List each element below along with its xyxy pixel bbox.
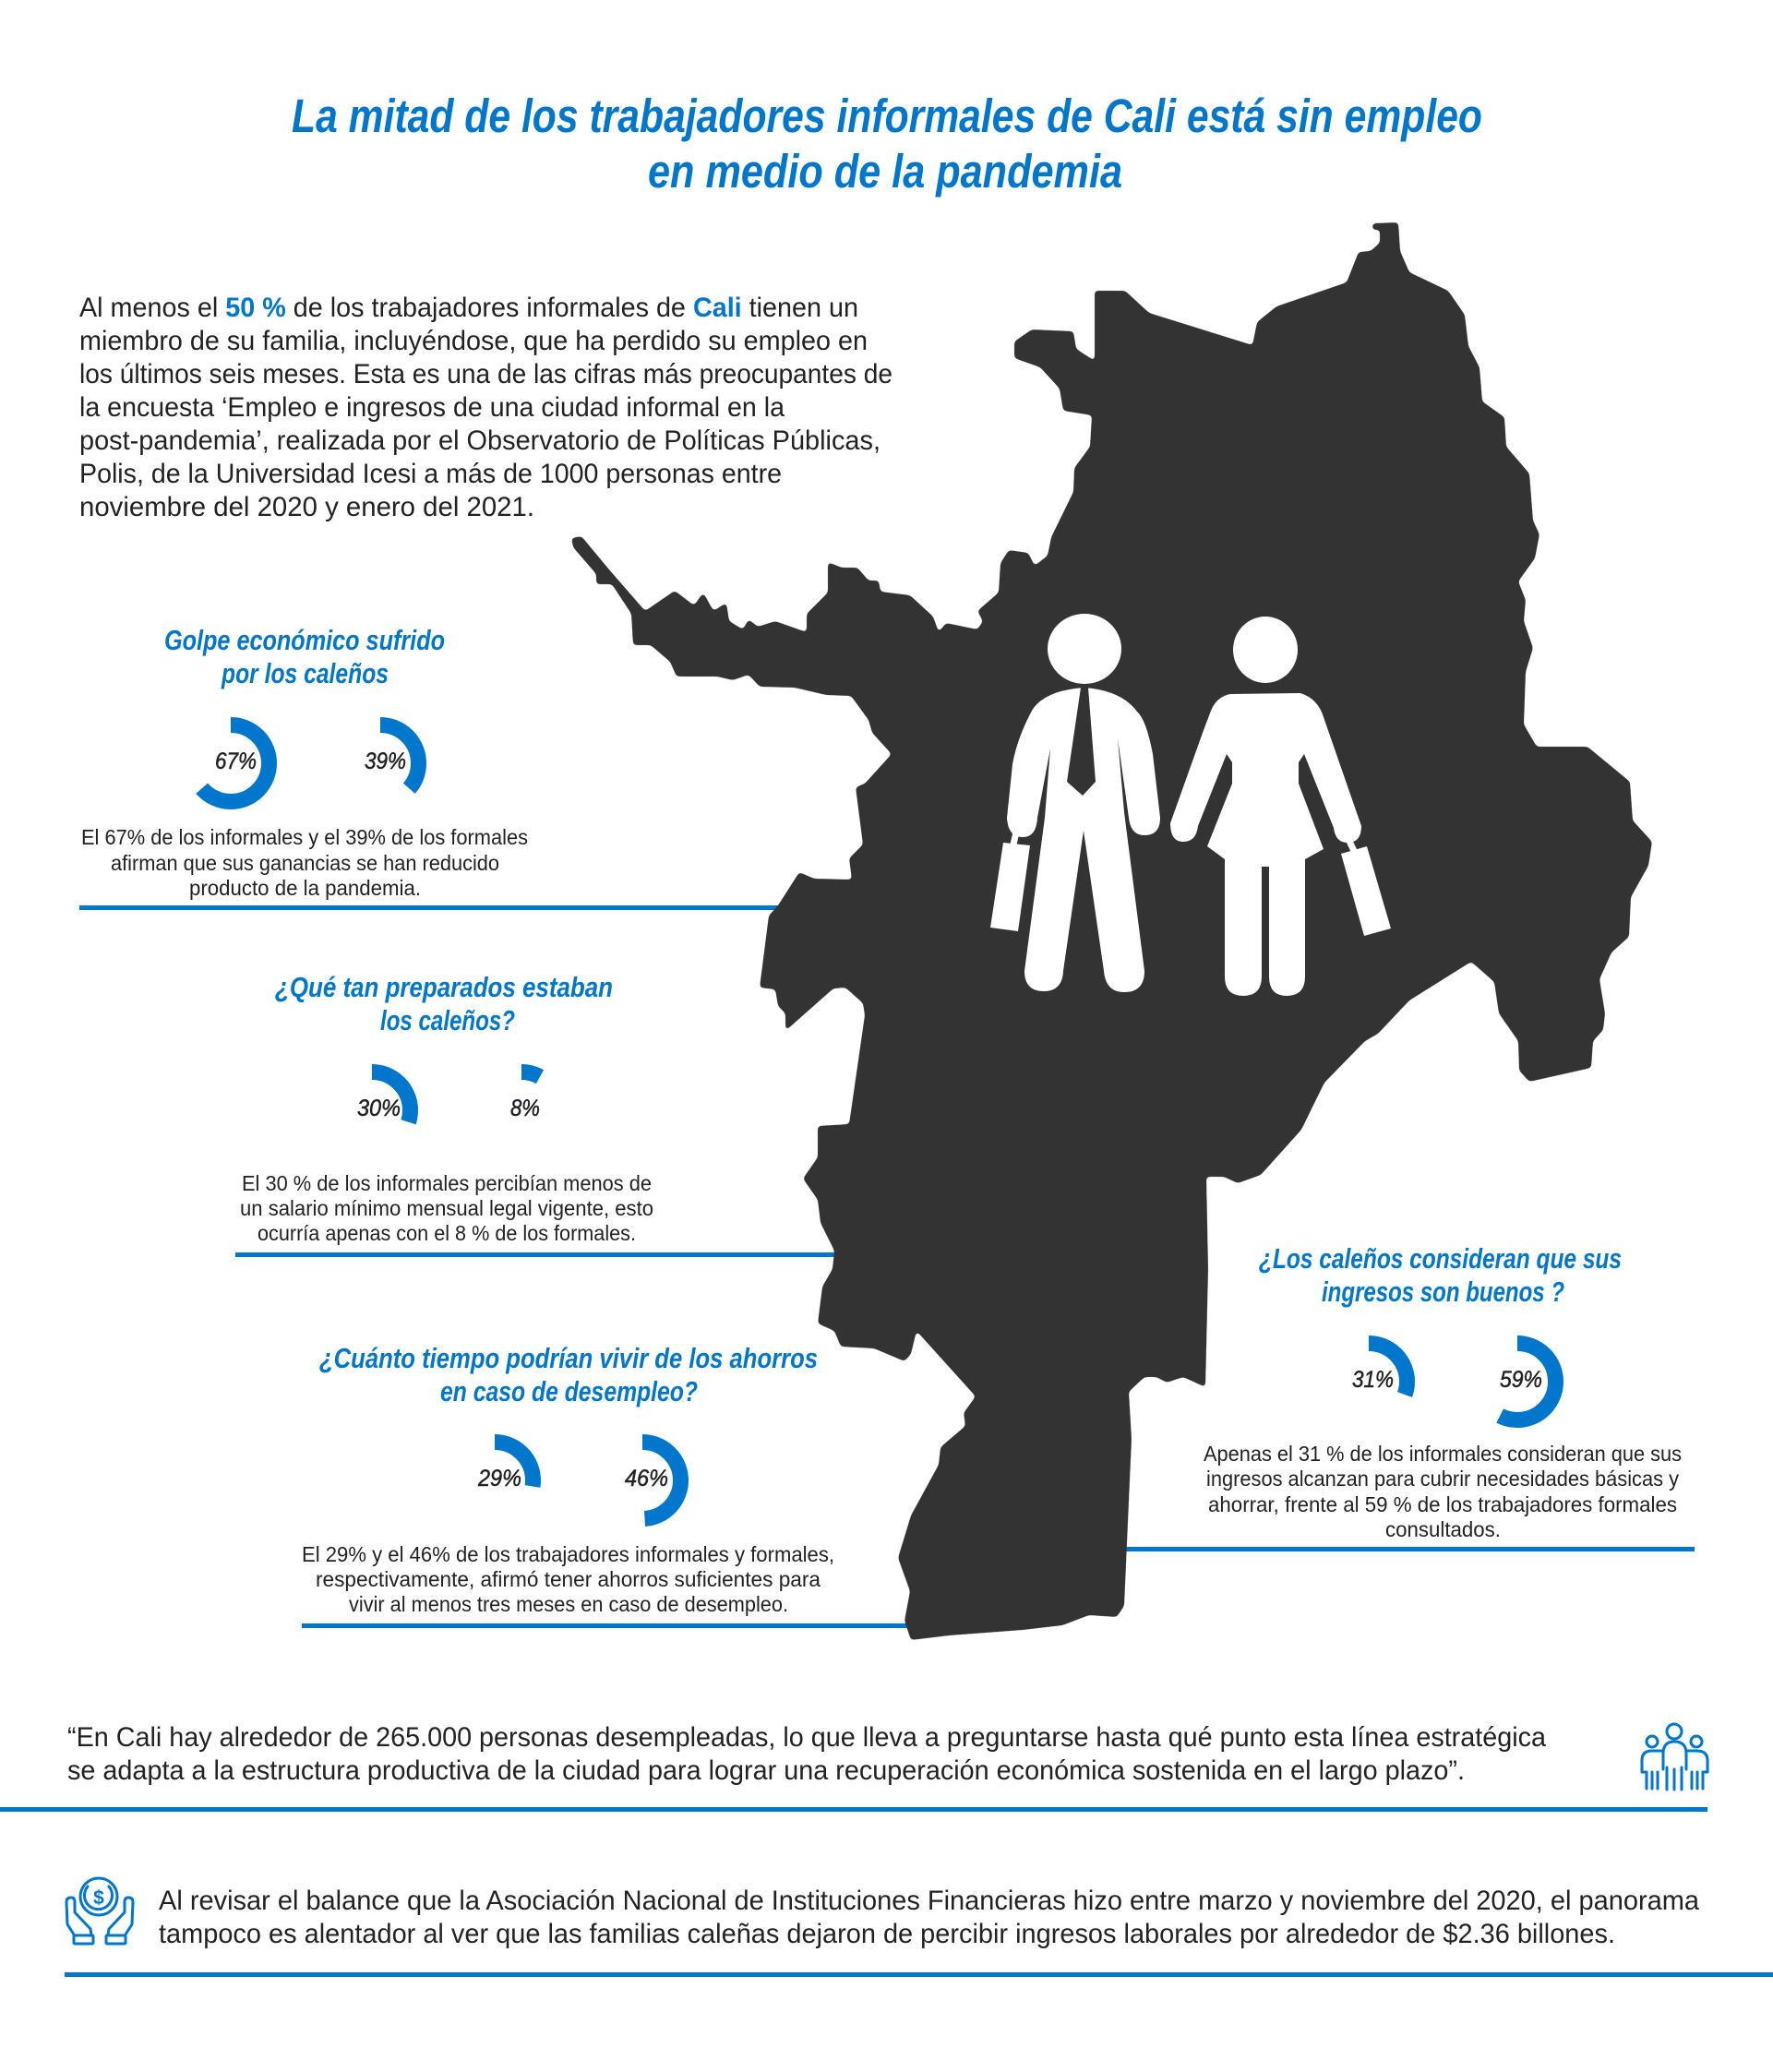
quote: se adapta a la estructura productiva de la ciudad para lograr una recuperación económica sostenida en el largo plazo”.: [67, 1755, 1465, 1786]
heading: ahorros: en caso de desempleo?: [440, 1375, 698, 1407]
text: ahorros: vivir al menos tres meses en caso de desempleo.: [349, 1592, 788, 1616]
intro paragraph: los últimos seis meses. Esta es una de las cifras más preocupantes de: [79, 359, 892, 389]
panel: ahorros: [302, 1342, 920, 1628]
text: ingresos: Apenas el 31 % de los informales consideran que sus: [1204, 1442, 1682, 1466]
intro paragraph: noviembre del 2020 y enero del 2021.: [79, 492, 534, 522]
icon: group of people: [1642, 1724, 1707, 1790]
text: ingresos: [1204, 1442, 1682, 1541]
map of Cali with people: [571, 222, 1652, 1640]
text: golpe económico: producto de la pandemia.: [189, 876, 421, 900]
donut: 29%: 29%: [477, 1466, 521, 1491]
text: golpe económico: [81, 825, 528, 900]
donut: 46%: [604, 1442, 681, 1519]
donut: 39%: 39%: [365, 749, 406, 774]
text: preparación: [240, 1171, 653, 1245]
heading: preparación: ¿Qué tan preparados estaban: [275, 971, 613, 1003]
donut: 59%: [1479, 1344, 1556, 1419]
intro paragraph: Polis, de la Universidad Icesi a más de 1000 personas entre: [79, 459, 782, 489]
intro paragraph: post-pandemia’, realizada por el Observatorio de Políticas Públicas,: [79, 425, 881, 456]
text: golpe económico: afirman que sus ganancias se han reducido: [111, 851, 499, 875]
text: preparación: El 30 % de los informales percibían menos de: [242, 1171, 652, 1195]
intro paragraph: [79, 293, 892, 522]
donut: 67%: 67%: [215, 749, 257, 774]
donut: 31%: [1331, 1344, 1407, 1419]
heading: ahorros: ¿Cuánto tiempo podrían vivir de los ahorros: [319, 1342, 818, 1374]
man's briefcase: [990, 828, 1030, 931]
closing text: [159, 1886, 1699, 1949]
donut: 67%: [192, 725, 270, 801]
quote: [67, 1722, 1546, 1786]
panel: ingresos: [1108, 1242, 1695, 1551]
intro paragraph: Al menos el 50 % de los trabajadores informales de Cali tienen un: [79, 293, 858, 323]
text: preparación: un salario mínimo mensual legal vigente, esto: [240, 1196, 653, 1220]
donut: 59%: 59%: [1500, 1367, 1542, 1393]
tie: [1067, 688, 1096, 796]
woman figure: [1170, 617, 1391, 996]
map silhouette: [571, 222, 1652, 1640]
donut: 46%: 46%: [625, 1466, 668, 1491]
intro paragraph: miembro de su familia, incluyéndose, que ha perdido su empleo en: [79, 326, 868, 356]
text: ahorros: respectivamente, afirmó tener ahorros suficientes para: [316, 1567, 821, 1591]
heading: golpe económico: por los caleños: [221, 657, 389, 689]
donut: 30%: [334, 1072, 410, 1148]
intro paragraph: la encuesta ‘Empleo e ingresos de una ciudad informal en la: [79, 392, 785, 423]
donut: 8%: [484, 1072, 559, 1148]
heading: golpe económico: Golpe económico sufrido: [164, 624, 445, 656]
heading: ingresos: ingresos son buenos ?: [1322, 1276, 1564, 1308]
text: ingresos: ahorrar, frente al 59 % de los trabajadores formales: [1208, 1492, 1677, 1516]
donut: 8%: 8%: [510, 1096, 540, 1121]
donut: 31%: 31%: [1352, 1367, 1394, 1393]
man figure: [990, 614, 1160, 992]
closing text: Al revisar el balance que la Asociación Nacional de Instituciones Financieras hizo entre marzo y noviembre del 2020, el panorama: [159, 1886, 1699, 1916]
title: La mitad de los trabajadores informales de Cali está sin empleo: [292, 90, 1482, 142]
title: en medio de la pandemia: [648, 145, 1122, 198]
woman's briefcase: [1341, 835, 1391, 936]
text: ahorros: [302, 1542, 834, 1616]
icon: hands holding money: $: [93, 1887, 104, 1909]
donut: 39%: [341, 725, 419, 801]
closing text: tampoco es alentador al ver que las familias caleñas dejaron de percibir ingresos laborales por alrededor de $2.36 billones.: [159, 1919, 1615, 1949]
quote: “En Cali hay alrededor de 265.000 personas desempleadas, lo que lleva a preguntarse hasta qué punto esta línea estratégica: [67, 1722, 1546, 1753]
heading: golpe económico: [164, 624, 445, 689]
title: [292, 90, 1482, 198]
donut: 30%: 30%: [357, 1096, 401, 1121]
text: ahorros: El 29% y el 46% de los trabajadores informales y formales,: [302, 1542, 834, 1566]
donut: 29%: [456, 1442, 533, 1519]
text: golpe económico: El 67% de los informales y el 39% de los formales: [81, 825, 528, 849]
heading: ingresos: ¿Los caleños consideran que sus: [1259, 1242, 1622, 1275]
text: ingresos: ingresos alcanzan para cubrir necesidades básicas y: [1206, 1467, 1679, 1491]
heading: ahorros: [319, 1342, 818, 1407]
icon: hands holding money: [66, 1878, 133, 1944]
text: ingresos: consultados.: [1385, 1517, 1501, 1541]
heading: preparación: los caleños?: [380, 1004, 515, 1036]
text: preparación: ocurría apenas con el 8 % de los formales.: [258, 1221, 636, 1245]
panel: golpe económico: [79, 624, 790, 910]
heading: preparación: [275, 971, 613, 1036]
heading: ingresos: [1259, 1242, 1622, 1308]
panel: preparación: [235, 971, 845, 1257]
